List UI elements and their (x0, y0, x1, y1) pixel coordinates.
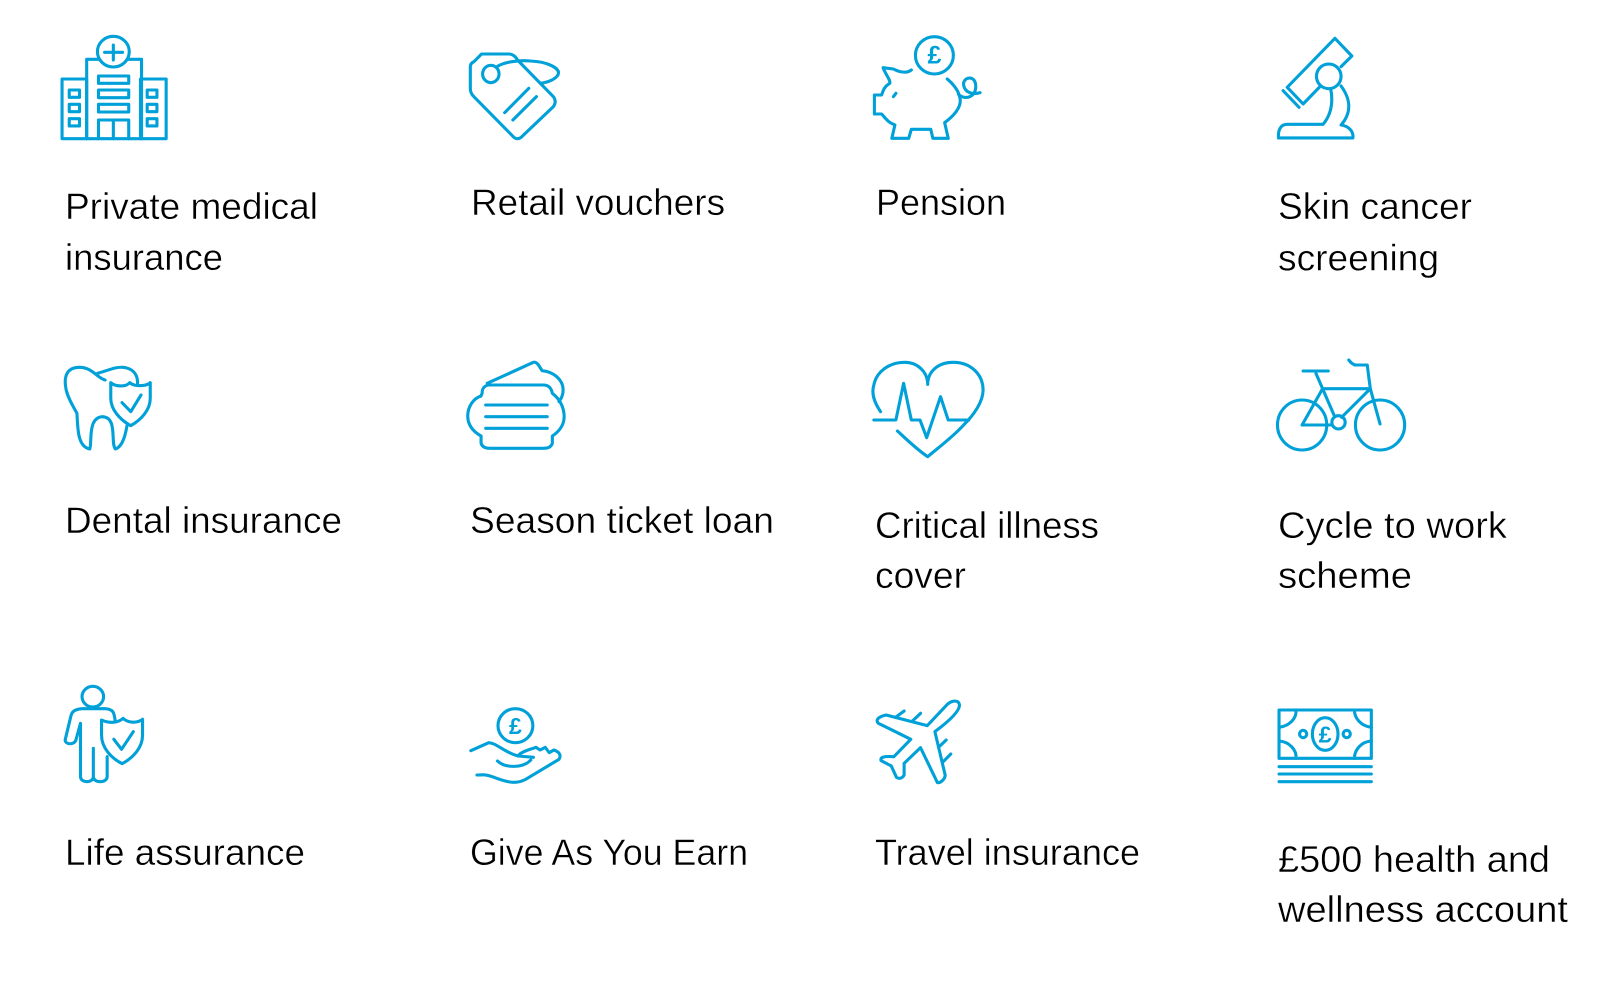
panel: retail vouchers (470, 54, 725, 223)
label: pension: Pension (876, 182, 1006, 223)
label: dental insurance: Dental insurance (65, 500, 342, 541)
icon: banknotes (1279, 710, 1371, 782)
label: critical illness cover: Critical illness (875, 505, 1099, 546)
label: £500 health and wellness account (1277, 839, 1569, 930)
icon: hospital (62, 36, 166, 139)
label: skin cancer screening (1278, 186, 1472, 278)
label: season ticket loan: Season ticket loan (470, 500, 774, 541)
panel: life assurance (65, 686, 305, 873)
label: skin cancer screening: Skin cancer (1278, 186, 1472, 227)
icon: aeroplane (877, 701, 960, 783)
icon: piggy bank with pound coin: £ (927, 41, 941, 69)
label: private medical insurance: insurance (65, 237, 223, 278)
icon: price tag (470, 54, 559, 139)
icon: microscope (1278, 38, 1353, 138)
panel: pension (874, 37, 1006, 223)
icon: hand with pound coin: £ (509, 713, 522, 739)
label: cycle to work scheme (1278, 505, 1508, 596)
panel: season ticket loan (468, 362, 774, 541)
label: cycle to work scheme: Cycle to work (1278, 505, 1508, 546)
panel: critical illness cover (873, 362, 1099, 596)
panel: skin cancer screening (1278, 38, 1472, 278)
icon: tooth with shield (65, 367, 150, 449)
panel: cycle to work scheme (1277, 360, 1508, 596)
panel: dental insurance (65, 367, 342, 541)
label: critical illness cover (875, 505, 1099, 596)
label: £500 health and wellness account: wellness account (1277, 889, 1569, 930)
panel: private medical insurance (62, 36, 318, 278)
icon: bicycle (1277, 360, 1405, 450)
label: private medical insurance (65, 186, 318, 278)
icon: person with shield (65, 686, 143, 782)
label: critical illness cover: cover (875, 555, 966, 596)
icon: piggy bank with pound coin (874, 37, 980, 138)
label: travel insurance: Travel insurance (875, 832, 1140, 873)
icon: ticket stack (468, 362, 564, 448)
icon: heart with pulse (873, 362, 983, 457)
label: life assurance: Life assurance (65, 832, 305, 873)
label: retail vouchers: Retail vouchers (471, 182, 725, 223)
panel: £500 health and wellness account (1277, 710, 1569, 930)
label: private medical insurance: Private medical (65, 186, 318, 227)
label: cycle to work scheme: scheme (1278, 555, 1412, 596)
label: £500 health and wellness account: £500 health and (1278, 839, 1550, 880)
label: give as you earn: Give As You Earn (470, 832, 748, 873)
icon: hand with pound coin (471, 709, 560, 782)
label: skin cancer screening: screening (1278, 238, 1439, 278)
icon: banknotes: £ (1319, 722, 1332, 748)
panel: give as you earn (470, 709, 748, 873)
panel: travel insurance (875, 701, 1140, 873)
